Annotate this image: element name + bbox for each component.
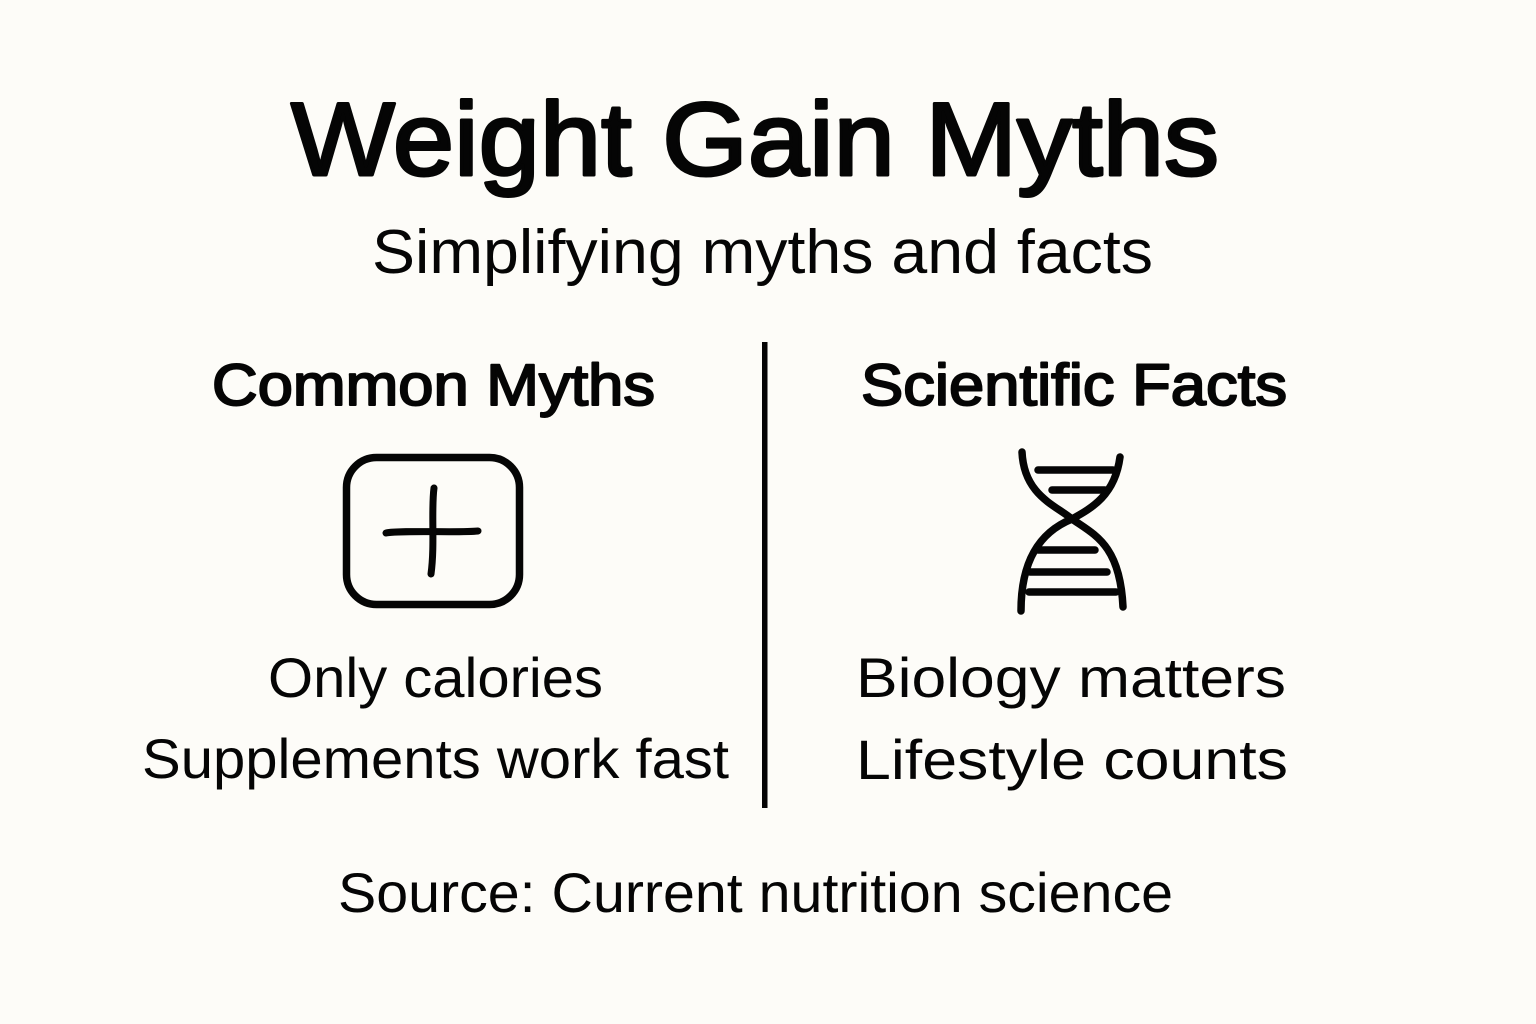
subtitle: Simplifying myths and facts xyxy=(372,218,1153,287)
heading: common myths: Common Myths xyxy=(212,353,655,418)
heading: scientific facts: Scientific Facts xyxy=(861,353,1287,418)
icon: dna helix xyxy=(1021,452,1123,611)
panel: common myths xyxy=(142,353,729,790)
title: Weight Gain Myths xyxy=(291,82,1219,198)
text: only calories: Only calories xyxy=(268,646,603,709)
text: biology matters: Biology matters xyxy=(856,646,1286,709)
text: supplements work fast: Supplements work fast xyxy=(142,727,729,790)
text: lifestyle counts: Lifestyle counts xyxy=(856,728,1288,791)
panel: scientific facts xyxy=(856,353,1288,791)
icon: plus in rounded square xyxy=(346,458,520,604)
source note: Source: Current nutrition science xyxy=(338,861,1173,924)
vertical divider xyxy=(762,342,768,808)
